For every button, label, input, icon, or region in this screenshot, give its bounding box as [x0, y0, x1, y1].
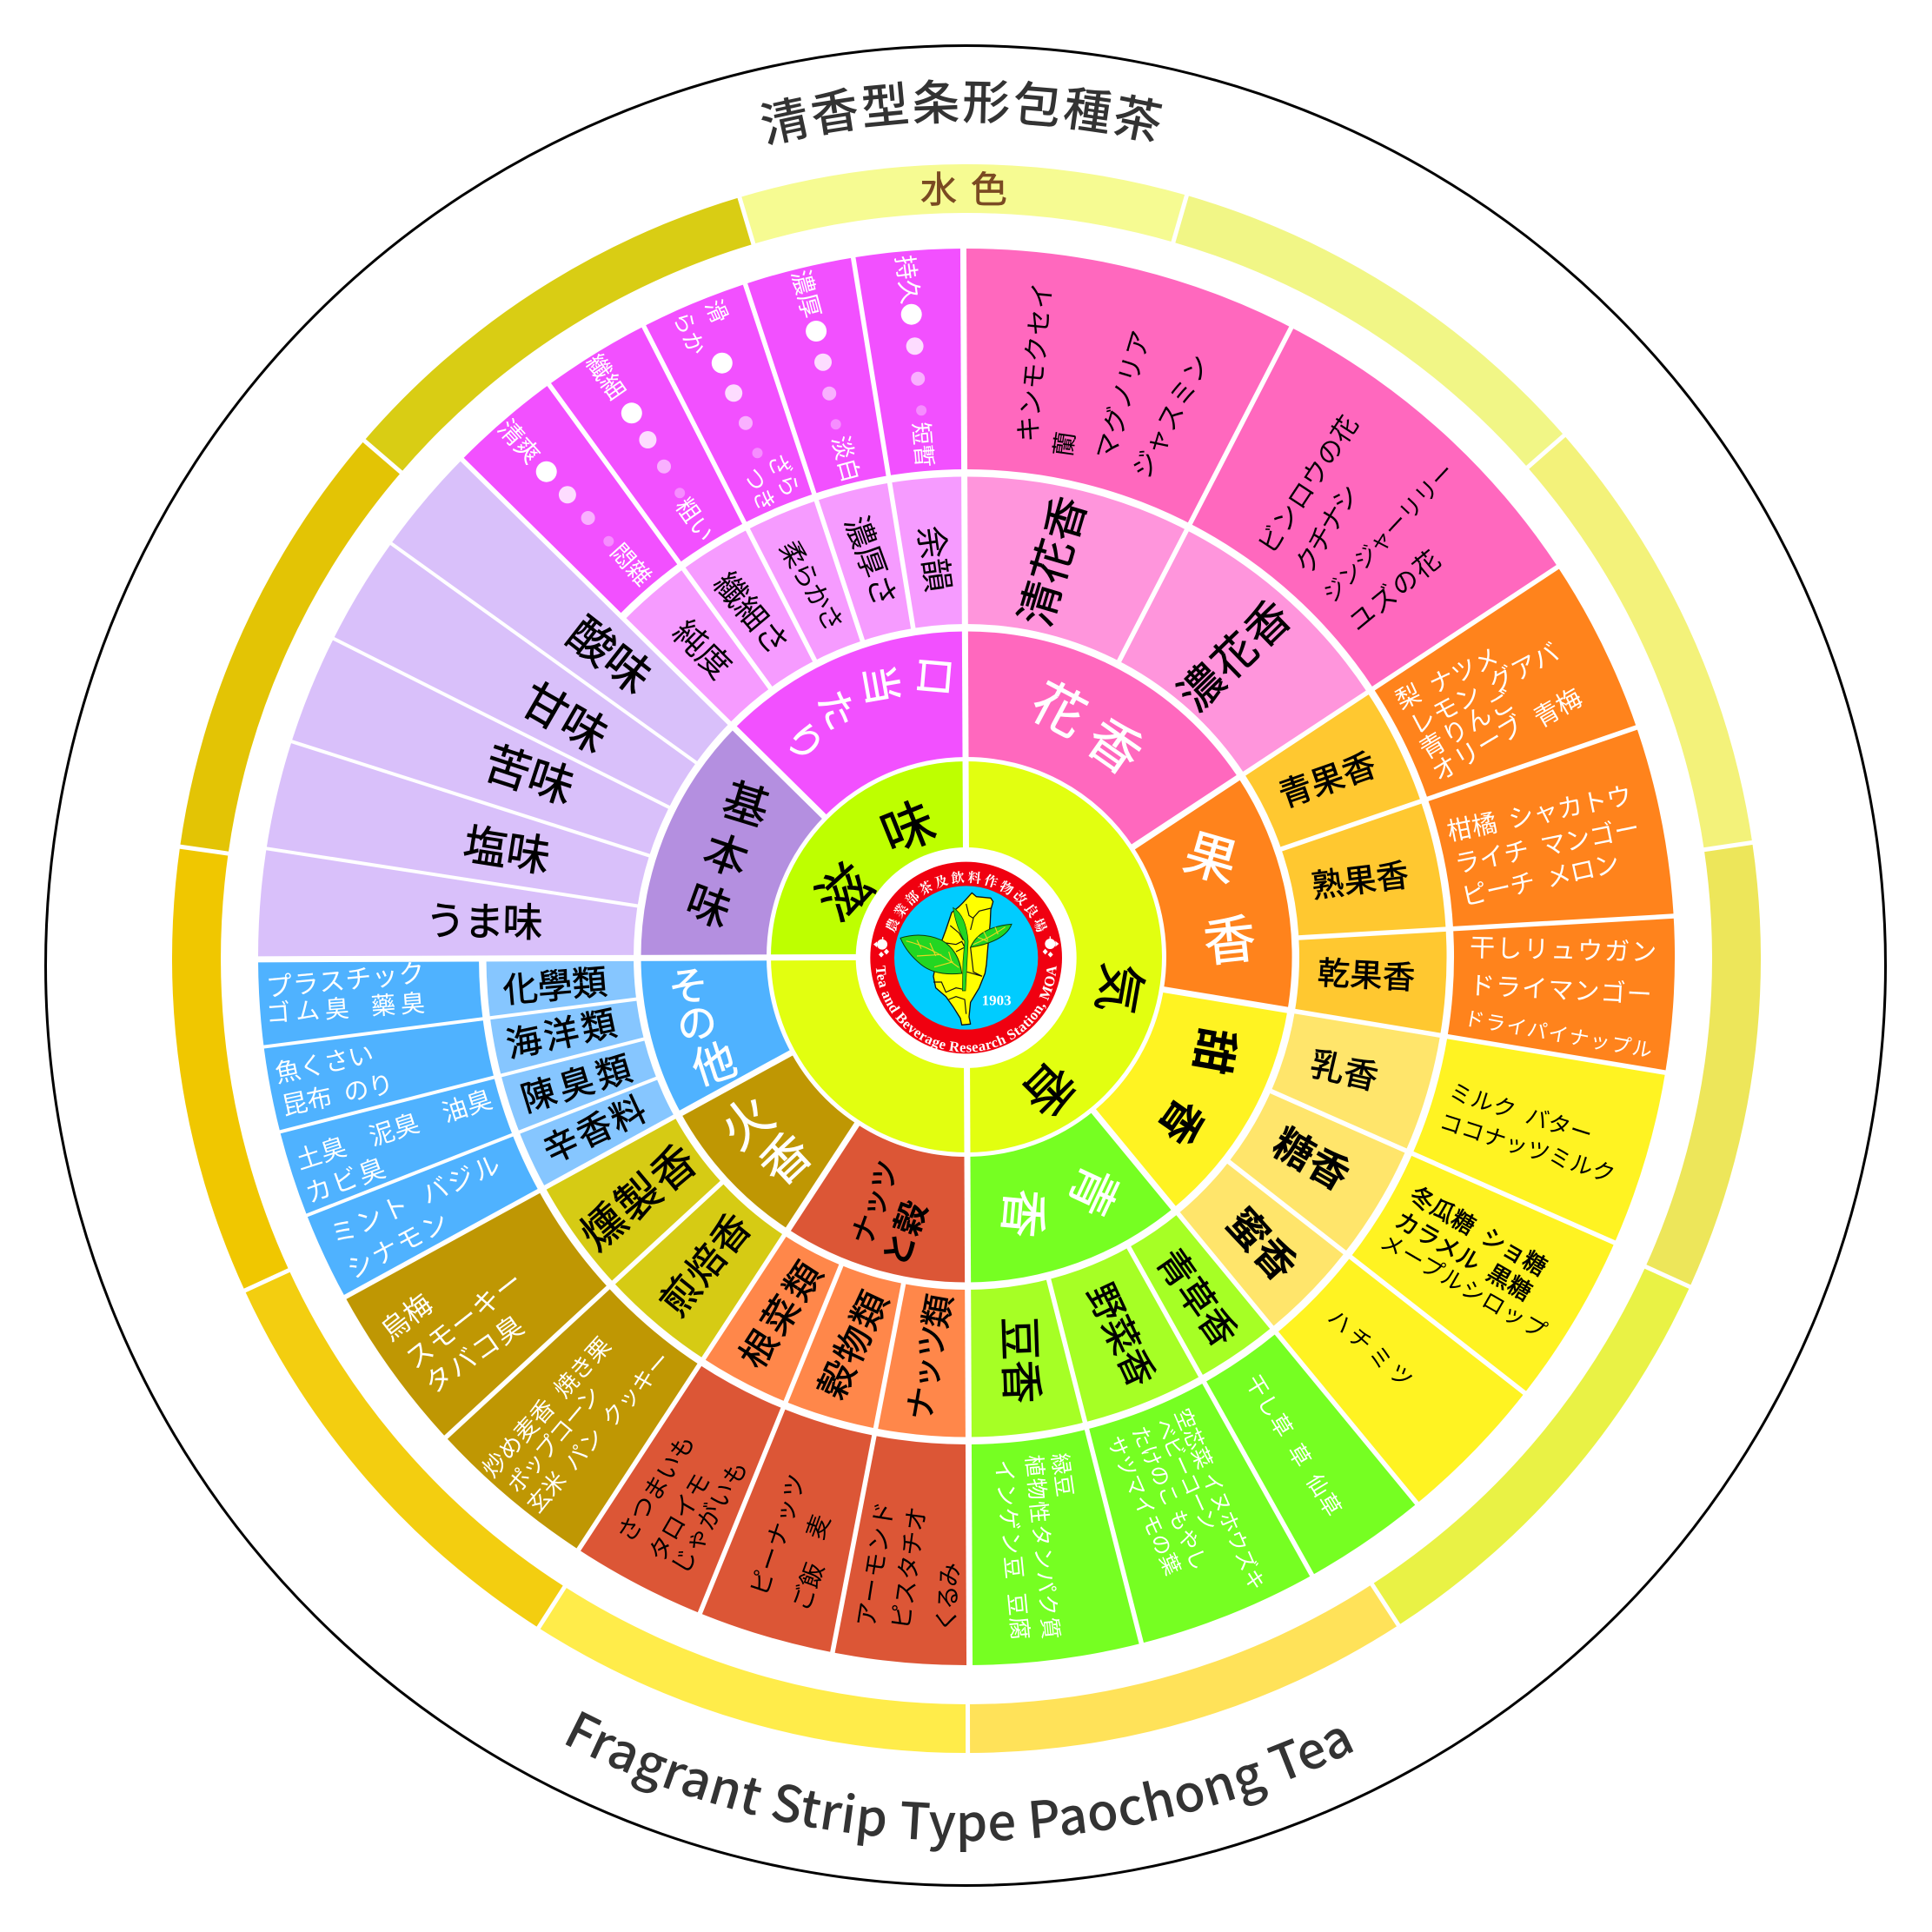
descriptor: ドライパイナップル: ドライパイナップル — [1463, 1006, 1654, 1062]
category label: 味: 味 — [680, 876, 737, 937]
category label: 果: 果 — [1178, 824, 1244, 893]
descriptor: ココナッツミルク: ココナッツミルク — [1437, 1108, 1618, 1188]
panel: green labels — [990, 1157, 1345, 1641]
descriptor: レモン グアバ: レモン グアバ — [1405, 638, 1564, 740]
core label: 気: 気 — [1086, 959, 1151, 1018]
descriptor: ピスタチオ: ピスタチオ — [887, 1505, 931, 1630]
subcategory: 乳香: 乳香 — [1307, 1046, 1381, 1098]
nuts: outer ring — [579, 1364, 970, 1665]
category label: 甜: 甜 — [1185, 1024, 1242, 1078]
panel: sweet labels — [1149, 1024, 1618, 1393]
subcategory: 燻製香: 燻製香 — [572, 1136, 706, 1260]
subcategory: 蜜香: 蜜香 — [1218, 1199, 1305, 1289]
other: inner ring — [641, 958, 791, 1113]
descriptor: カビ臭: カビ臭 — [302, 1154, 389, 1209]
title: Chinese: 清香型条形包種茶 — [761, 79, 1163, 145]
subcategory: 乾果香: 乾果香 — [1317, 955, 1416, 996]
descriptor: ビンロウの花: ビンロウの花 — [1253, 411, 1364, 559]
descriptor: クチナシ: クチナシ — [1291, 480, 1365, 579]
logo: English ring text: Tea and Beverage Research Station, MOA — [876, 965, 1057, 1052]
mouthfeel: outer ring — [462, 249, 965, 614]
subcategory: 酸味: 酸味 — [558, 608, 660, 704]
category label: 口: 口 — [910, 654, 959, 698]
panel: colour band ring — [172, 164, 1761, 1756]
scale: delicacy — [581, 349, 719, 547]
scale: delicacy: 纖細 — [581, 349, 631, 405]
descriptor: マグノリア: マグノリア — [1092, 328, 1157, 463]
descriptor: メープルシロップ: メープルシロップ — [1376, 1228, 1550, 1344]
descriptor: ライチ マンゴー: ライチ マンゴー — [1452, 813, 1642, 880]
subcategory: 清花香: 清花香 — [1011, 491, 1096, 632]
logo: Chinese ring text: 農業部茶及飲料作物改良場 — [885, 871, 1048, 933]
subcategory: 根菜類: 根菜類 — [732, 1255, 830, 1376]
descriptor: タロイモ: タロイモ — [644, 1469, 715, 1566]
scale: smoothness: ざら — [762, 449, 805, 501]
floral: middle ring — [965, 476, 1367, 773]
subcategory: 苦味: 苦味 — [478, 738, 580, 814]
descriptor: ポップコーン: ポップコーン — [502, 1382, 606, 1498]
fruit: outer ring — [1373, 567, 1675, 1072]
basic taste: outer ring — [258, 460, 729, 959]
green: outer ring — [969, 1333, 1417, 1665]
category label: 本: 本 — [697, 826, 754, 886]
band segment 6 — [968, 1584, 1398, 1753]
descriptor: 烏梅: 烏梅 — [375, 1288, 438, 1347]
category label: 香: 香 — [1076, 707, 1152, 786]
band segment 4 — [1645, 843, 1761, 1287]
descriptor: ミルク バター: ミルク バター — [1446, 1079, 1596, 1148]
band segment 2 — [1173, 196, 1564, 468]
floral: outer ring — [963, 249, 1557, 688]
descriptor: 土臭 泥臭 油臭: 土臭 泥臭 油臭 — [293, 1086, 495, 1176]
descriptor: さつまいも: さつまいも — [612, 1430, 700, 1547]
subcategory: ナッツ類: ナッツ類 — [902, 1291, 959, 1424]
scale: persistence — [891, 254, 938, 468]
scale: smoothness: らか — [668, 307, 710, 359]
category label: り: り — [775, 714, 833, 772]
fruit: middle ring — [1245, 693, 1447, 1035]
band label: water colour: 水 — [920, 169, 957, 210]
nuts: middle ring — [704, 1236, 969, 1437]
nuts: inner ring — [788, 1125, 968, 1283]
band segment 10 — [180, 441, 402, 853]
mouthfeel: inner ring — [734, 631, 966, 817]
category label: 青: 青 — [1059, 1157, 1128, 1225]
category label: 香: 香 — [993, 1186, 1052, 1240]
core label: 滋: 滋 — [806, 853, 884, 932]
scale: clarity: 悶雜 — [605, 539, 656, 591]
band label: water colour: 色 — [971, 169, 1007, 210]
descriptor: 玄米 パン クッキー: 玄米 パン クッキー — [522, 1346, 675, 1518]
category label: 花: 花 — [1022, 672, 1095, 748]
band segment 5 — [1372, 1266, 1690, 1625]
subcategory: 陳臭類: 陳臭類 — [517, 1050, 636, 1119]
descriptor: 青りんご: 青りんご — [1415, 687, 1519, 765]
scale: richness: 淡白 — [827, 433, 864, 485]
logo: tea leaves — [900, 907, 1012, 991]
category label: 火: 火 — [710, 1086, 785, 1160]
band segment 9 — [172, 846, 289, 1291]
subcategory: 野菜香: 野菜香 — [1079, 1278, 1162, 1393]
descriptor: 炒め麦香 焼き栗: 炒め麦香 焼き栗 — [477, 1332, 616, 1483]
descriptor: インゲン豆 豆腐: インゲン豆 豆腐 — [990, 1458, 1033, 1641]
subcategory: 甘味: 甘味 — [512, 674, 616, 763]
subcategory: 辛香料: 辛香料 — [538, 1091, 653, 1171]
subcategory: 穀物類: 穀物類 — [811, 1285, 896, 1405]
descriptor: 青梅: 青梅 — [1529, 683, 1587, 734]
descriptor: 麦: 麦 — [801, 1511, 835, 1543]
descriptor: プラスチック: プラスチック — [265, 959, 426, 1003]
descriptor: ジンジャーリリー: ジンジャーリリー — [1318, 458, 1459, 607]
subcategory: 濃花香: 濃花香 — [1170, 592, 1300, 720]
subcategory: 海洋類: 海洋類 — [503, 1005, 620, 1066]
core label: 香: 香 — [1011, 1051, 1086, 1125]
descriptor: 干しリュウガン: 干しリュウガン — [1470, 934, 1656, 967]
sweet: outer ring — [1277, 1037, 1665, 1504]
descriptor: ジャスミン: ジャスミン — [1128, 350, 1215, 483]
descriptor: 緑豆: 緑豆 — [1046, 1451, 1077, 1498]
descriptor: オリーブ: オリーブ — [1427, 711, 1529, 787]
panel: fire labels — [375, 1086, 822, 1518]
scale: smoothness: 滑 — [700, 295, 733, 327]
descriptor: 冬瓜糖 ショ糖: 冬瓜糖 ショ糖 — [1405, 1182, 1551, 1281]
fire: inner ring — [681, 1053, 857, 1229]
descriptor: タバコ臭: タバコ臭 — [419, 1310, 529, 1400]
subcategory: うま味: うま味 — [425, 898, 543, 946]
descriptor: シナモン: シナモン — [342, 1208, 454, 1285]
panel: floral labels — [1011, 282, 1459, 786]
band segment 7 — [539, 1587, 968, 1753]
descriptor: ミント バジル: ミント バジル — [326, 1151, 505, 1251]
scale: delicacy: 粗い — [670, 494, 719, 547]
descriptor: カラメル 黒糖: カラメル 黒糖 — [1391, 1207, 1537, 1306]
green: inner ring — [967, 1111, 1173, 1283]
floral: inner ring — [965, 631, 1238, 846]
category label: 香: 香 — [1149, 1089, 1213, 1153]
band segment 1 (water colour) — [740, 164, 1187, 244]
subcategory: 濃厚さ: 濃厚さ — [838, 511, 904, 612]
title: English: Fragrant Strip Type Paochong Tea — [565, 1710, 1354, 1852]
descriptor: ゴム臭 藥臭: ゴム臭 藥臭 — [265, 989, 426, 1027]
descriptor: サツマイモの葉: サツマイモの葉 — [1102, 1433, 1185, 1579]
band segment 3 — [1528, 435, 1752, 850]
subcategory: 糖香: 糖香 — [1265, 1119, 1358, 1199]
band segment 11 — [364, 197, 754, 473]
subcategory: 熟果香: 熟果香 — [1310, 857, 1411, 905]
subcategory: 柔らかさ: 柔らかさ — [773, 536, 848, 637]
mouthfeel: middle ring — [625, 476, 965, 723]
scale: clarity: 清爽 — [493, 415, 545, 468]
category label: と穀: と穀 — [878, 1197, 935, 1271]
logo: right teapot — [1043, 936, 1059, 958]
scale: persistence: 持久 — [891, 254, 924, 306]
scale: clarity — [493, 415, 656, 591]
descriptor: キンモクセイ: キンモクセイ — [1014, 282, 1058, 443]
fire: middle ring — [545, 1117, 784, 1358]
subcategory: 青果香: 青果香 — [1274, 747, 1381, 815]
logo: year: 1903 — [982, 992, 1012, 1008]
category label: 基: 基 — [717, 775, 774, 836]
category label: 香: 香 — [1201, 910, 1258, 973]
descriptor: ベビーコーン: ベビーコーン — [1150, 1415, 1221, 1535]
green: middle ring — [968, 1213, 1271, 1437]
descriptor: ドライマンゴー: ドライマンゴー — [1469, 972, 1652, 1009]
descriptor: たけのこ もやし: たけのこ もやし — [1126, 1423, 1212, 1574]
panel: basic taste labels — [425, 608, 774, 946]
descriptor: 植物性タンパク質: 植物性タンパク質 — [1021, 1454, 1063, 1640]
sweet: middle ring — [1178, 1012, 1440, 1327]
ring segment: aroma core — [771, 761, 1162, 1152]
logo: Taiwan island — [933, 893, 993, 1025]
category label: そ: そ — [667, 962, 710, 1011]
logo: Tea and Beverage Research Station emblem — [855, 847, 1077, 1068]
descriptor: じゃがいも: じゃがいも — [667, 1456, 753, 1578]
category label: 香: 香 — [749, 1123, 822, 1196]
descriptor: ユズの花: ユズの花 — [1344, 546, 1446, 637]
panel: wheel sector backgrounds — [254, 244, 1678, 1670]
panel: mouthfeel labels — [493, 254, 959, 772]
descriptor: アーモンド: アーモンド — [853, 1500, 899, 1629]
subcategory: 煎焙香: 煎焙香 — [653, 1206, 760, 1325]
subcategory: 青草香: 青草香 — [1149, 1242, 1245, 1354]
scale: persistence: 短暫 — [907, 421, 938, 468]
descriptor: 梨 ナツメ: 梨 ナツメ — [1391, 643, 1504, 714]
panel: fruit labels — [1178, 638, 1656, 1062]
sweet: inner ring — [1093, 990, 1288, 1208]
panel: nuts and grains labels — [612, 1157, 964, 1633]
category label: の: の — [674, 998, 720, 1050]
band segment 8 — [245, 1271, 565, 1628]
descriptor: 干し草 草 仙草: 干し草 草 仙草 — [1240, 1371, 1345, 1521]
ring segment: taste core — [771, 761, 966, 958]
subcategory: 純度: 純度 — [665, 614, 738, 687]
scale: smoothness: つき — [739, 463, 780, 515]
subcategory: 纖細さ: 纖細さ — [707, 566, 795, 662]
category label: た: た — [808, 684, 864, 736]
subcategory: 豆香: 豆香 — [994, 1316, 1046, 1404]
panel: core labels — [806, 792, 1151, 1125]
descriptor: ピーチ メロン: ピーチ メロン — [1459, 850, 1623, 912]
descriptor: ご飯: ご飯 — [787, 1559, 829, 1615]
descriptor: スモーキー: スモーキー — [400, 1265, 528, 1375]
descriptor: 昆布 のり: 昆布 のり — [280, 1070, 396, 1121]
descriptor: ピーナッツ: ピーナッツ — [746, 1471, 812, 1599]
scale: richness — [787, 267, 864, 485]
category label: ナッツ: ナッツ — [846, 1157, 906, 1249]
fire: outer ring — [345, 1191, 700, 1550]
basic taste: inner ring — [641, 728, 824, 958]
descriptor: 蘭: 蘭 — [1050, 430, 1079, 458]
descriptor: 空芯菜 イヌホウズキ: 空芯菜 イヌホウズキ — [1170, 1405, 1268, 1594]
other: middle ring — [487, 958, 674, 1187]
descriptor: 柑橘 シャカトウ: 柑橘 シャカトウ — [1444, 781, 1635, 846]
panel: other labels — [265, 959, 742, 1285]
logo: left teapot — [873, 937, 889, 958]
core label: 味: 味 — [873, 792, 943, 865]
fruit: inner ring — [1133, 778, 1292, 1010]
descriptor: くるみ: くるみ — [933, 1562, 964, 1633]
subcategory: 余韻: 余韻 — [911, 523, 956, 594]
subcategory: 化學類: 化學類 — [501, 963, 608, 1011]
other: outer ring — [258, 959, 539, 1297]
subcategory: 塩味: 塩味 — [460, 820, 554, 881]
scale: smoothness — [668, 295, 805, 515]
scale: richness: 濃厚 — [787, 267, 826, 321]
descriptor: 魚くさい: 魚くさい — [273, 1039, 376, 1089]
category label: 当: 当 — [854, 661, 906, 708]
category label: 他: 他 — [687, 1035, 742, 1094]
descriptor: ハチミツ: ハチミツ — [1323, 1305, 1417, 1393]
